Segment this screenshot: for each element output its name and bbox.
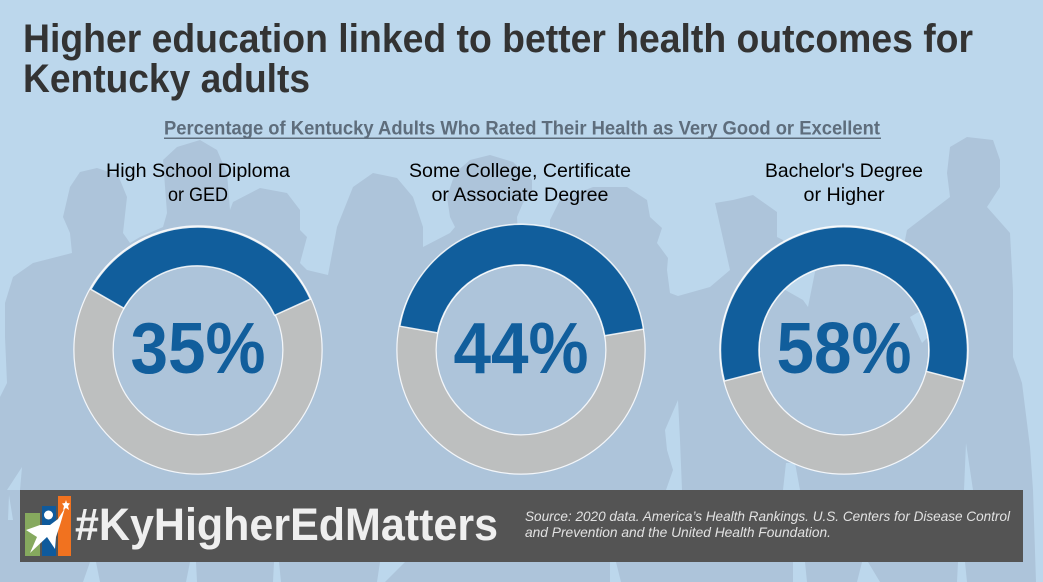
label: some college: Some College, Certificate [409, 160, 631, 182]
label: some college [409, 160, 631, 206]
label: high school [106, 160, 290, 206]
logo icon [25, 496, 71, 556]
donut chart: 44% [400, 224, 644, 454]
label: high school: High School Diploma [106, 160, 290, 182]
title: Kentucky adults [23, 57, 310, 101]
source note [525, 508, 1011, 540]
donut chart: 58% [720, 227, 968, 454]
footer bar [20, 490, 1023, 562]
silhouettes of people [0, 137, 1036, 582]
label: bachelor's: Bachelor's Degree [765, 160, 923, 182]
light gaps between figures [7, 310, 973, 582]
title: Higher education linked to better health outcomes for [23, 17, 973, 61]
value: 35%: 35% [130, 309, 266, 389]
source note: and Prevention and the United Health Foundation. [525, 524, 831, 540]
donut chart: 35% [91, 227, 310, 454]
label: bachelor's: or Higher [804, 184, 885, 206]
hashtag: #KyHigherEdMatters [75, 499, 498, 550]
value: 58%: 58% [776, 309, 912, 389]
subtitle: Percentage of Kentucky Adults Who Rated Their Health as Very Good or Excellent [164, 118, 881, 140]
label: some college: or Associate Degree [432, 184, 608, 206]
source note: Source: 2020 data. America’s Health Rankings. U.S. Centers for Disease Control [525, 508, 1011, 524]
label: high school: or GED [168, 184, 228, 206]
value: 44%: 44% [454, 309, 588, 389]
title [23, 17, 973, 101]
label: bachelor's [765, 160, 923, 206]
